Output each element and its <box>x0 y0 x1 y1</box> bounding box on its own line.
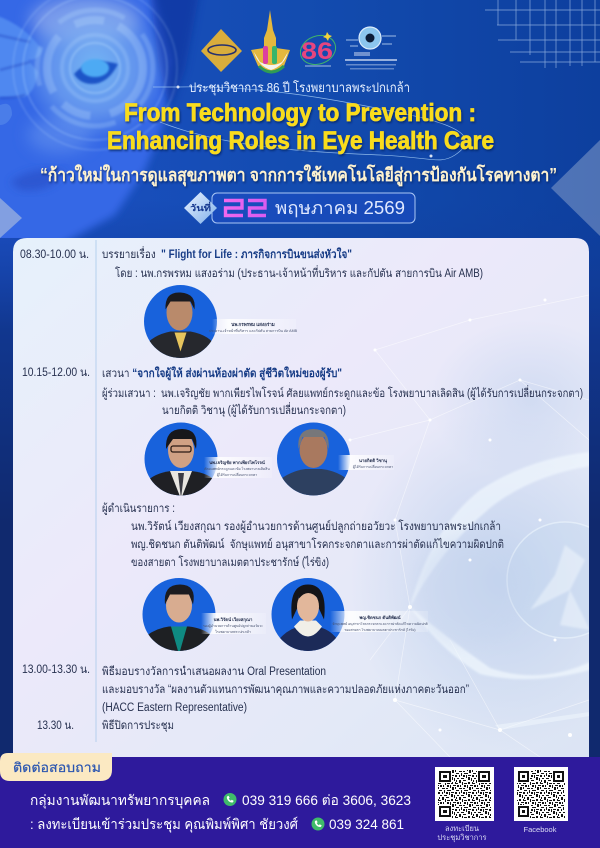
portrait: speaker <box>142 284 298 362</box>
logos <box>201 10 397 72</box>
icon: phone <box>312 818 324 830</box>
caption ribbon <box>330 611 428 632</box>
portrait: panelist 1 <box>143 422 272 499</box>
hair shadow <box>150 0 200 110</box>
corner grid <box>485 0 600 68</box>
item: 10.15 panel discussion: 10.15-12.00 น. <box>22 367 90 379</box>
item: moderators: ของสายตา โรงพยาบาลเมตตาประชารักษ์ (ไร่ขิง) <box>131 555 329 569</box>
item: 08.30 lecture: โดย : นพ.กรพรหม แสงอร่าม (ประธาน-เจ้าหน้าที่บริหาร และกัปตัน สายการบิน Air AMB) <box>115 265 483 280</box>
contact tab: ติดต่อสอบถาม <box>13 760 101 775</box>
QR code: Facebook <box>514 767 568 821</box>
contact line 1: กลุ่มงานพัฒนาทรัพยากรบุคคล <box>30 792 210 809</box>
item: 13.00 awards: และมอบรางวัล “ผลงานตัวแทนการพัฒนาคุณภาพและความปลอดภัยแห่งภาคตะวันออก” <box>102 684 469 696</box>
hand <box>0 15 42 97</box>
QR label: registration: ประชุมวิชาการ <box>437 833 487 842</box>
face shape <box>0 0 172 245</box>
title: Enhancing Roles in Eye Health Care <box>107 127 494 155</box>
caption ribbon: นายกิตติ วิชานุ <box>359 458 387 464</box>
caption ribbon <box>338 455 394 470</box>
caption ribbon: โรงพยาบาลพระปกเกล้า <box>215 629 251 634</box>
item: 10.15 panel discussion <box>22 366 583 417</box>
title <box>107 99 494 155</box>
iris <box>506 522 589 638</box>
QR code: registration <box>435 767 494 821</box>
item: 08.30 lecture: 08.30-10.00 น. <box>20 249 89 261</box>
eye shape lower lid <box>416 612 589 680</box>
contact line 1: 039 319 666 ต่อ 3606, 3623 <box>242 792 411 808</box>
item: 10.15 panel discussion: เสวนา “จากใจผู้ให้ ส่งผ่านห้องผ่าตัด สู่ชีวิตใหม่ของผู้รับ" <box>102 366 342 381</box>
contact tab <box>0 753 112 781</box>
lips <box>10 170 65 191</box>
caption ribbon: นพ.วิรัตน์ เวียงสกุณา <box>214 616 253 623</box>
panel: schedule <box>13 238 600 758</box>
portrait: panelist 2 <box>276 422 394 499</box>
portrait: moderator 2 <box>271 578 428 654</box>
icon: phone <box>224 793 236 806</box>
item: moderators: ผู้ดำเนินรายการ : <box>102 502 175 515</box>
icon: date diamond <box>184 192 217 224</box>
logo: 86 years <box>296 31 340 69</box>
item: 13.00 awards: (HACC Eastern Representative) <box>102 702 247 714</box>
item: 08.30 lecture: บรรยายเรื่อง " Flight for Life : ภารกิจการบินขนส่งหัวใจ" <box>102 246 352 261</box>
orbit lines <box>153 86 466 160</box>
caption ribbon: ประธาน-เจ้าหน้าที่บริหาร และกัปตัน สายการบิน Air AMB <box>209 328 298 333</box>
title: From Technology to Prevention : <box>124 99 476 127</box>
caption ribbon <box>204 457 272 478</box>
caption ribbon: ศัลยแพทย์กระดูกและข้อ โรงพยาบาลเลิดสิน <box>204 466 270 471</box>
caption ribbon: จักษุแพทย์ อนุสาขาโรคกระจกตาและการผ่าตัดแก้ไขความผิดปกติ <box>332 621 428 627</box>
QR label: registration: ลงทะเบียน <box>445 824 479 833</box>
footer: contact <box>0 753 600 848</box>
QR label: Facebook: Facebook <box>524 825 557 834</box>
item: moderators: พญ.ชิดชนก ตันติพัฒน์ จักษุแพทย์ อนุสาขาโรคกระจกตาและการผ่าตัดแก้ไขความผิดปกติ <box>131 537 504 551</box>
caption ribbon: ของสายตา โรงพยาบาลเมตตาประชารักษ์ (ไร่ขิง) <box>344 627 416 632</box>
contact line 1 <box>30 792 411 809</box>
portrait: moderator 1 <box>141 578 266 654</box>
caption ribbon: ผู้ได้รับการเปลี่ยนกระจกตา <box>217 472 257 477</box>
caption ribbon <box>209 319 298 334</box>
date number <box>224 200 266 217</box>
item: 13.00 awards <box>22 664 469 714</box>
caption ribbon: พญ.ชิดชนก ตันติพัฒน์ <box>359 614 401 621</box>
item: moderators: นพ.วิรัตน์ เวียงสกุณา รองผู้อำนวยการด้านศูนย์ปลูกถ่ายอวัยวะ โรงพยาบาลพระปกเกล้า <box>131 519 501 533</box>
item: moderators <box>102 502 504 569</box>
QR label: registration <box>437 824 487 842</box>
caption ribbon: นพ.กรพรหม แสงอร่าม <box>231 322 275 327</box>
item: 13.00 awards: 13.00-13.30 น. <box>22 664 90 676</box>
item: 13.30 closing: พิธีปิดการประชุม <box>102 719 174 732</box>
logo: eye institute <box>345 27 397 70</box>
icon: date diamond: วันที่ <box>190 201 211 213</box>
caption ribbon <box>201 613 266 634</box>
contact line 2: : ลงทะเบียนเข้าร่วมประชุม คุณพิมพ์พิศา ชัยวงศ์ <box>30 816 298 833</box>
caption ribbon: ผู้ได้รับการเปลี่ยนกระจกตา <box>353 464 393 469</box>
item: 08.30 lecture <box>20 246 483 280</box>
logo: 86 years: 86 <box>301 38 333 65</box>
caption ribbon: รองผู้อำนวยการด้านศูนย์ปลูกถ่ายอวัยวะ <box>203 624 263 628</box>
item: 13.30 closing <box>37 719 174 732</box>
face and eye artwork <box>0 0 200 245</box>
logo: gold diamond <box>201 29 242 72</box>
faint web lines <box>350 295 589 757</box>
conference line: ประชุมวิชาการ 86 ปี โรงพยาบาลพระปกเกล้า <box>189 80 410 96</box>
eye <box>74 62 118 84</box>
date badge: พฤษภาคม 2569 <box>275 198 405 218</box>
logo: crest <box>251 10 290 72</box>
contact line 2: 039 324 861 <box>329 816 404 832</box>
item: 10.15 panel discussion: นายกิตติ วิชานุ (ผู้ได้รับการเปลี่ยนกระจกตา) <box>162 402 346 417</box>
item: 13.00 awards: พิธีมอบรางวัลการนำเสนอผลงาน Oral Presentation <box>102 665 326 678</box>
network artwork <box>348 295 600 757</box>
side diamonds <box>0 140 600 238</box>
caption ribbon: นพ.เจริญชัย พากเพียรไพโรจน์ <box>209 459 265 466</box>
date badge <box>184 192 415 224</box>
item: 13.30 closing: 13.30 น. <box>37 720 74 732</box>
eye shape upper lid <box>410 452 590 607</box>
